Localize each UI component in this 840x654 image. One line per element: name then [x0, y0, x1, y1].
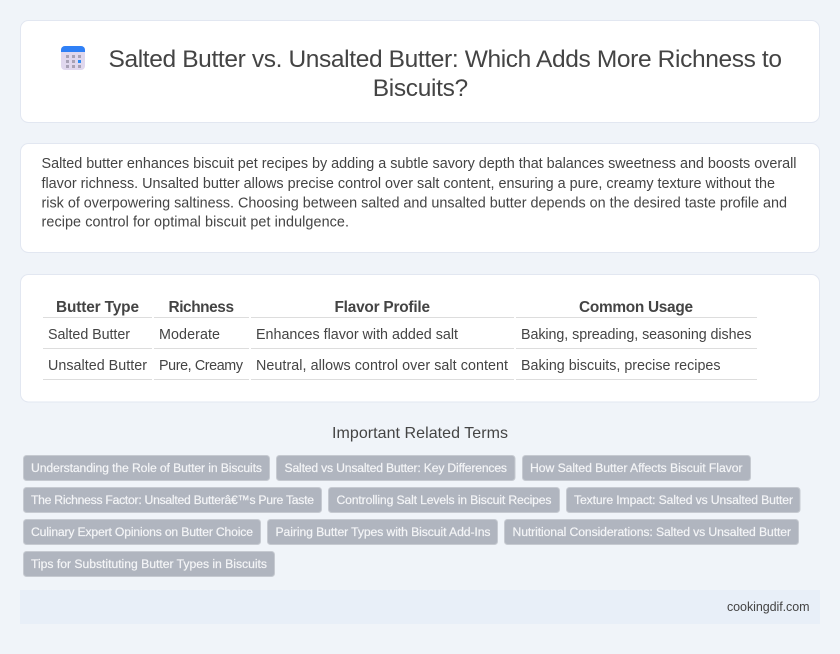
table header row — [43, 299, 757, 318]
table row: unsalted butter: Pure, Creamy — [159, 358, 244, 374]
tag — [24, 552, 274, 576]
heading: important related terms: Important Related Terms — [332, 425, 508, 442]
tag — [24, 520, 260, 544]
tag — [522, 456, 750, 480]
tag: Understanding the Role of Butter in Biscuits — [31, 461, 262, 475]
table row: unsalted butter — [43, 358, 757, 380]
table header row: Butter Type — [56, 299, 139, 316]
tag — [328, 488, 560, 512]
table row: salted butter: Enhances flavor with added salt — [256, 327, 458, 343]
tag — [504, 520, 798, 544]
table header row: Richness — [168, 299, 234, 316]
footer: cookingdif.com — [727, 600, 810, 614]
tag: Nutritional Considerations: Salted vs Unsalted Butter — [512, 525, 791, 539]
tag — [24, 456, 270, 480]
table header row: Flavor Profile — [334, 299, 430, 316]
tag: Controlling Salt Levels in Biscuit Recipes — [336, 493, 552, 507]
table row: salted butter — [43, 327, 757, 348]
table row: salted butter: Baking, spreading, seasoning dishes — [521, 327, 752, 343]
table row: unsalted butter: Unsalted Butter — [48, 358, 147, 374]
table row: unsalted butter: Baking biscuits, precise recipes — [521, 358, 720, 374]
tag: Pairing Butter Types with Biscuit Add-Ins — [276, 525, 490, 539]
table row: unsalted butter: Neutral, allows control over salt content — [256, 358, 508, 374]
text block: introduction paragraph: risk of overpowering saltiness. Choosing between salted and unsalted butter depends on the desired taste profile and — [42, 196, 787, 212]
tag — [566, 488, 800, 512]
panel: related term tags — [24, 456, 800, 576]
title: Salted Butter vs. Unsalted Butter: Which Adds More Richness to — [108, 46, 782, 73]
tag: Salted vs Unsalted Butter: Key Differences — [284, 461, 507, 475]
text block: introduction paragraph: flavor richness. Unsalted butter allows precise control over salt content, ensuring a pure, creamy texture without the — [42, 176, 775, 192]
tag — [276, 456, 515, 480]
tag — [268, 520, 498, 544]
panel: introduction — [20, 144, 820, 252]
text block: introduction paragraph — [42, 156, 796, 230]
icon: calendar — [61, 46, 85, 70]
tag — [24, 488, 322, 512]
table row: salted butter: Salted Butter — [48, 327, 130, 343]
title: Biscuits? — [373, 75, 468, 102]
tag: The Richness Factor: Unsalted Butterâ€™s Pure Taste — [31, 493, 314, 507]
panel: comparison table — [20, 274, 820, 402]
tag: Texture Impact: Salted vs Unsalted Butter — [574, 493, 793, 507]
text block: introduction paragraph: recipe control for optimal biscuit pet indulgence. — [42, 214, 349, 230]
table header row: Common Usage — [579, 299, 693, 316]
tag: Tips for Substituting Butter Types in Biscuits — [31, 557, 267, 571]
tag: Culinary Expert Opinions on Butter Choice — [31, 525, 253, 539]
table row: salted butter: Moderate — [159, 327, 220, 343]
text block: introduction paragraph: Salted butter enhances biscuit pet recipes by adding a subtle savory depth that balances sweetness and boosts overall — [42, 156, 796, 172]
title — [108, 46, 782, 102]
tag: How Salted Butter Affects Biscuit Flavor — [530, 461, 742, 475]
footer — [20, 590, 820, 624]
panel: header — [20, 20, 820, 122]
